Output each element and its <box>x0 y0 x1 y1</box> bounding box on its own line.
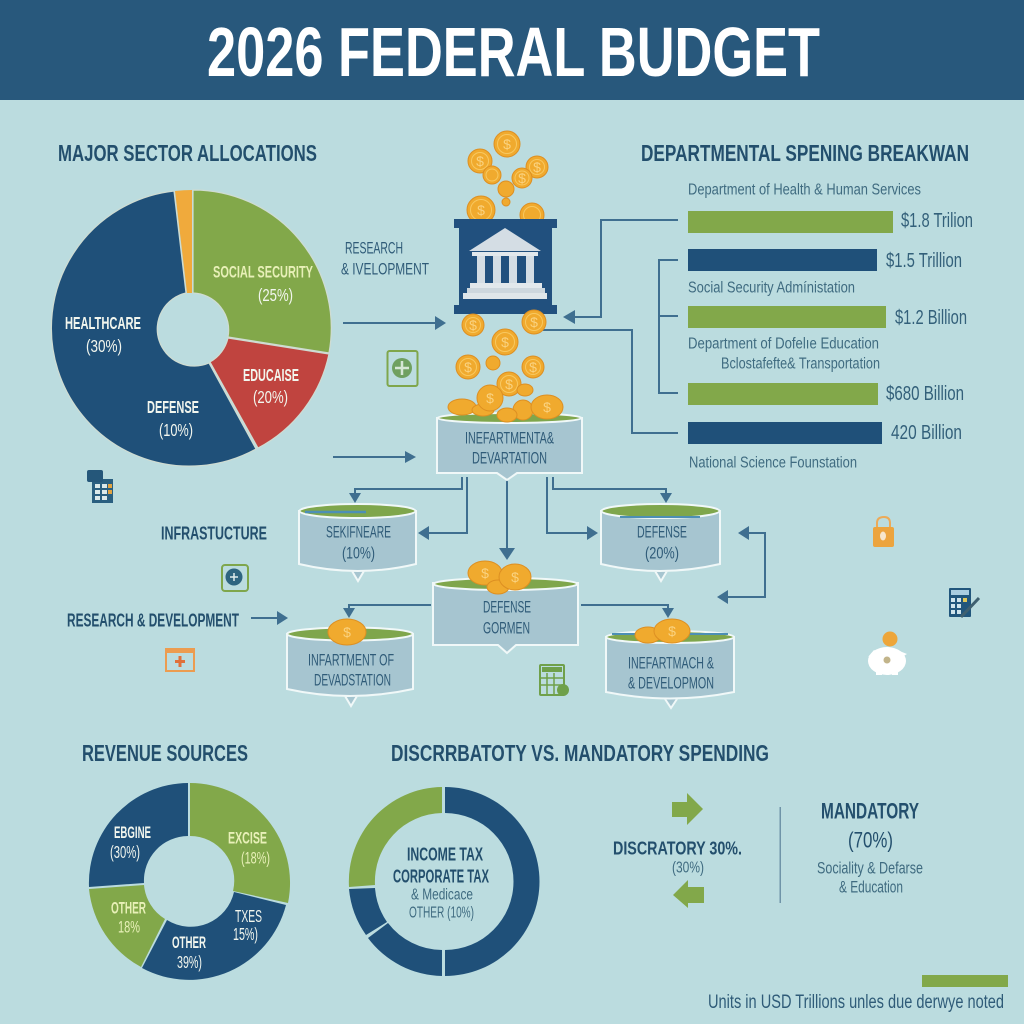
donut chart: revenue <box>89 783 290 980</box>
donut chart: revenue: (18%) <box>241 848 270 868</box>
label: mandatory <box>817 798 923 896</box>
donut chart: revenue: 39%) <box>177 952 202 972</box>
coins falling below treasury: $ <box>530 314 538 330</box>
label: infrastructure: INFRASTUCTURE <box>161 522 267 544</box>
bar row: defense education: Bclostafefte& Transportation <box>721 356 880 372</box>
node: cylinder defense 20 percent: (20%) <box>645 544 679 562</box>
pie chart: sectors: EDUCAISE <box>243 365 299 385</box>
bar row: defense education: Department of Dofelıe Education <box>688 336 879 352</box>
node: main department cylinder <box>437 385 582 480</box>
icon: green health card <box>388 351 418 386</box>
title: 2026 FEDERAL BUDGET <box>207 13 820 91</box>
node: cylinder 10 percent: SEKIFNEARE <box>326 522 391 542</box>
pie chart: sectors: (25%) <box>258 285 293 305</box>
arrow: pie to treasury <box>343 316 446 330</box>
pie chart: sectors <box>51 190 331 466</box>
donut chart: spending <box>349 787 540 976</box>
donut chart: revenue: 18% <box>118 918 140 936</box>
node: cylinder defense center: DEFENSE <box>483 598 531 616</box>
panel: revenue sources <box>82 740 290 980</box>
coins falling below treasury <box>456 310 546 396</box>
pie chart: sectors: (30%) <box>86 336 122 356</box>
label: discretionary <box>613 838 742 876</box>
bar row: national science foundation <box>688 422 962 472</box>
connector: department bars to treasury <box>563 220 678 324</box>
bar row: transportation: $680 Billion <box>886 383 964 405</box>
node: main department cylinder: DEVARTATION <box>472 448 547 468</box>
node: cylinder lower right <box>606 619 734 708</box>
heading: discretionary vs mandatory: DISCRRBATOTY VS. MANDATORY SPENDING <box>391 740 769 766</box>
pie chart: sectors: HEALTHCARE <box>65 313 141 333</box>
donut chart: revenue: EXCISE <box>228 828 267 848</box>
pie chart: sectors: (10%) <box>159 420 193 440</box>
arrow: into departments <box>333 451 416 463</box>
node: cylinder lower left <box>287 619 413 706</box>
donut chart: revenue: EBGINE <box>114 824 151 842</box>
bar row: health and human services: Department of Health & Human Services <box>688 182 921 198</box>
donut chart: revenue: OTHER <box>111 898 146 918</box>
node: cylinder defense center: $ <box>511 569 519 585</box>
donut chart: spending: CORPORATE TAX <box>393 866 489 886</box>
icon: treasury building <box>454 219 557 314</box>
bar row: social security administration: Social Security Admínistation <box>688 280 855 296</box>
arrow: green left <box>673 880 704 908</box>
label: research and development: RESEARCH & DEVELOPMENT <box>67 610 239 630</box>
icon: orange lock <box>873 517 894 547</box>
node: main department cylinder: INEFARTMENTA& <box>465 428 554 448</box>
node: main department cylinder: $ <box>486 390 494 406</box>
coins falling below treasury: $ <box>529 359 537 375</box>
pie chart: sectors: SOCIAL SECURITY <box>213 262 313 282</box>
label: mandatory: (70%) <box>848 828 893 852</box>
icon: orange medical card <box>166 649 194 671</box>
panel: departmental spending breakdown <box>641 140 973 472</box>
arrow: right side return to flow chart <box>717 526 765 604</box>
connectors: departments flow chart <box>343 477 674 618</box>
node: cylinder defense center: GORMEN <box>483 618 530 638</box>
donut chart: revenue: (30%) <box>110 842 140 862</box>
bar row: transportation <box>688 383 964 405</box>
icon: green tile <box>222 565 248 591</box>
pie chart: sectors: DEFENSE <box>147 397 199 417</box>
node: cylinder defense 20 percent: DEFENSE <box>637 522 687 542</box>
label: discretionary: DISCRATORY 30%. <box>613 838 742 858</box>
label: discretionary: (30%) <box>672 860 704 876</box>
coins falling below treasury: $ <box>469 317 477 333</box>
footer accent bar <box>922 975 1008 987</box>
node: cylinder lower right: & DEVELOPMON <box>628 674 714 692</box>
coins falling above treasury: $ <box>503 136 511 152</box>
heading: revenue sources: REVENUE SOURCES <box>82 740 248 766</box>
coins falling below treasury: $ <box>501 334 509 350</box>
coins falling above treasury: $ <box>476 153 484 169</box>
donut chart: spending: & Medicace <box>411 886 473 904</box>
node: cylinder 10 percent: (10%) <box>342 544 375 562</box>
donut chart: revenue: 15%) <box>233 924 258 944</box>
label: mandatory: & Education <box>839 878 903 896</box>
donut chart: revenue: TXES <box>235 906 262 926</box>
node: cylinder lower left: DEVADSTATION <box>314 670 391 690</box>
icon: green calculator <box>540 665 569 696</box>
bar row: social security administration: $1.5 Trillion <box>886 250 962 272</box>
node: cylinder defense 20 percent <box>601 504 720 581</box>
donut chart: spending: INCOME TAX <box>407 844 483 864</box>
donut chart: spending: OTHER (10%) <box>409 904 474 922</box>
coins falling above treasury: $ <box>477 202 485 218</box>
icon: piggy bank <box>868 632 907 675</box>
arrow: research to cylinder <box>251 611 288 625</box>
icon: calculator and wallet <box>87 470 113 503</box>
donut chart: revenue: OTHER <box>172 934 206 952</box>
label: mandatory: MANDATORY <box>821 798 919 824</box>
bar row: social security administration <box>688 249 962 296</box>
header banner <box>0 0 1024 100</box>
node: cylinder lower left: INFARTMENT OF <box>308 650 394 670</box>
pie chart: sectors: (20%) <box>253 387 288 407</box>
label: research and development top <box>341 238 429 278</box>
bar row: national science foundation: National Science Founstation <box>689 454 857 472</box>
bracket: middle bar connector <box>659 260 678 393</box>
panel: discretionary vs mandatory <box>349 740 923 976</box>
label: research and development top: & IVELOPMENT <box>341 260 429 278</box>
bar row: defense education <box>688 306 967 372</box>
node: cylinder defense center <box>433 561 578 653</box>
node: main department cylinder: $ <box>543 399 551 415</box>
panel: major sector allocations <box>51 140 331 466</box>
arrow: green right <box>672 793 703 825</box>
node: cylinder defense center: $ <box>481 565 489 581</box>
node: cylinder 10 percent <box>299 504 416 581</box>
node: cylinder lower right: $ <box>668 623 676 639</box>
label: mandatory: Sociality & Defarse <box>817 858 923 878</box>
bar row: national science foundation: 420 Billion <box>891 422 962 444</box>
bar row: health and human services: $1.8 Trilion <box>901 210 973 232</box>
bar row: health and human services <box>688 182 973 233</box>
bar row: defense education: $1.2 Billion <box>895 307 967 329</box>
coins falling above treasury: $ <box>533 159 541 175</box>
coins falling above treasury: $ <box>518 170 526 186</box>
heading: major sector allocations: MAJOR SECTOR ALLOCATIONS <box>58 140 317 166</box>
coins falling above treasury <box>467 131 548 227</box>
label: research and development top: RESEARCH <box>345 238 403 258</box>
icon: calculator and pen <box>949 588 979 617</box>
connector: treasury to national science bar <box>543 330 678 433</box>
node: cylinder lower left: $ <box>343 624 351 640</box>
coins falling below treasury: $ <box>505 376 513 392</box>
node: cylinder lower right: INEFARTMACH & <box>628 654 714 672</box>
coins falling below treasury: $ <box>464 359 472 375</box>
